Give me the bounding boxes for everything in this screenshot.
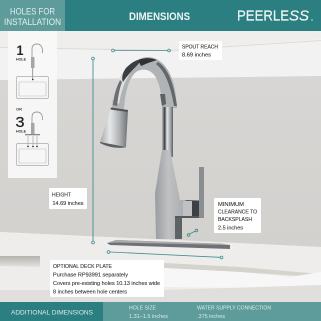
callout: optional deck plate: Purchase RP93991 separately [53,272,128,278]
faucet riser [162,107,173,157]
callout: height: HEIGHT [52,192,72,198]
clearance dimension line [187,229,198,236]
callout: minimum clearance: BACKSPLASH [218,217,252,223]
deck plate dimension line [107,251,223,259]
handle lever [199,167,204,218]
panel: holes for installation [8,31,57,178]
pull-down spray head [100,108,128,147]
three hole option: 3 [16,114,24,131]
hole size: 1.31–1.5 inches [129,314,168,320]
callout: spout reach: 8.69 inches [182,52,211,58]
callout: minimum clearance [214,198,261,233]
header band [0,0,321,31]
three hole option: HOLE [16,128,26,134]
hole size: HOLE SIZE [129,306,156,312]
faucet body [155,150,199,239]
callout: spout reach [179,41,222,60]
callout: minimum clearance: CLEARANCE TO [218,210,257,216]
spout arch [112,57,177,110]
three hole option [16,108,48,166]
heading: holes for installation [0,0,65,31]
callout: optional deck plate [50,260,164,297]
callout: minimum clearance: MINIMUM [218,202,245,208]
callout: optional deck plate: Covers pre-existing holes 10.13 inches wide [53,281,160,287]
logo: Peerless: SS [289,8,309,24]
three hole option: OR [16,108,22,112]
heading: holes for installation: HOLES FOR [10,6,55,18]
hole size [129,306,168,320]
water supply connection [197,306,271,320]
footer heading [0,302,103,321]
callout: minimum clearance: 2.5 inches [218,226,243,232]
callout: spout reach: SPOUT REACH [182,44,218,50]
footer band [0,302,321,321]
one hole option [16,42,48,98]
logo: Peerless: PEERLE [237,8,289,24]
height dimension line [92,57,94,244]
footer heading: ADDITIONAL DIMENSIONS [11,310,93,316]
spout reach dimension line [112,49,170,52]
callout: height: 14.69 inches [52,201,84,207]
water supply connection: .375 inches [197,314,225,320]
callout: height [49,188,87,209]
callout: optional deck plate: OPTIONAL DECK PLATE [53,264,112,270]
deck plate [107,240,230,249]
one hole option: HOLE [16,56,26,62]
callout: optional deck plate: 8 inches between hole centers [53,290,127,296]
one hole option: 1 [16,42,24,58]
faucet [100,57,230,249]
heading: holes for installation: INSTALLATION [4,17,61,28]
heading: dimensions: DIMENSIONS [129,11,190,23]
water supply connection: WATER SUPPLY CONNECTION [197,306,271,312]
